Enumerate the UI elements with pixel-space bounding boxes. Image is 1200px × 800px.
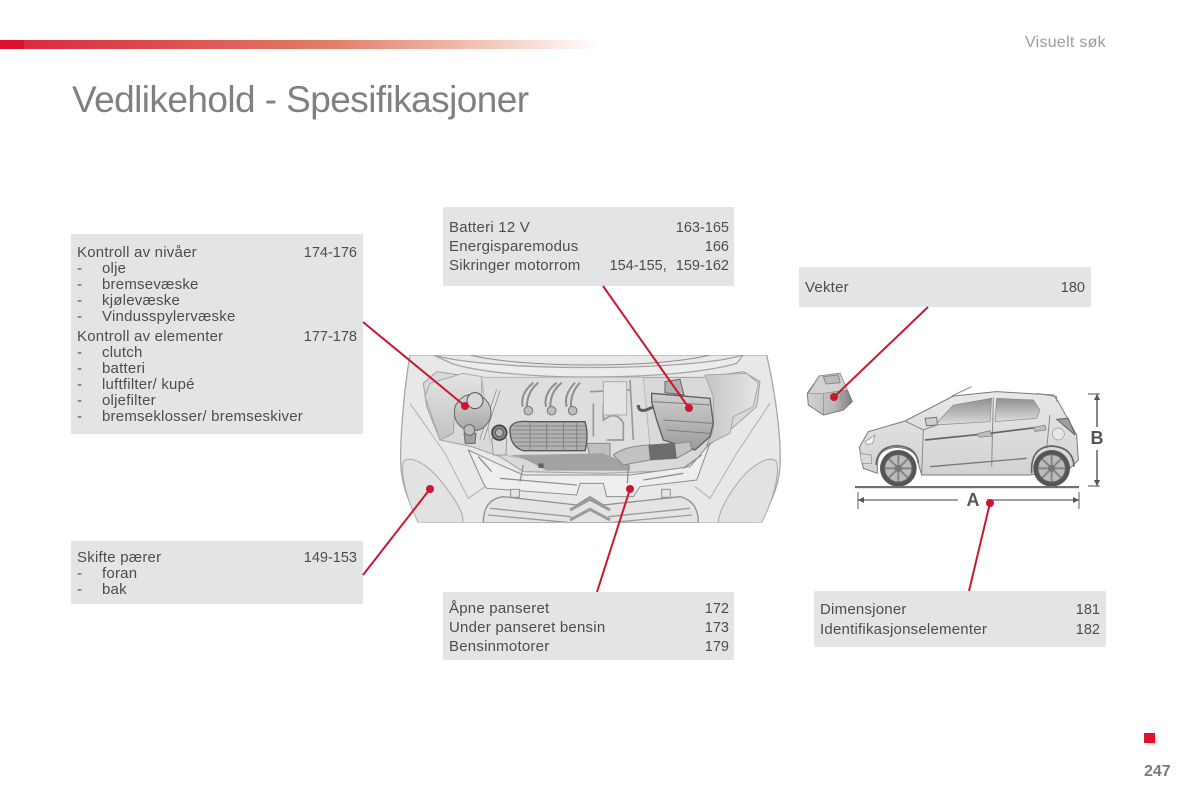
panel: bonnet: Bensinmotorer <box>449 638 549 655</box>
callout: bonnet <box>597 485 634 592</box>
panel: bulbs: 149-153 <box>304 550 357 566</box>
panel: weights <box>799 267 1091 307</box>
panel: levels and elements: - <box>77 276 82 293</box>
panel: weights: Vekter <box>805 279 849 296</box>
panel: dimensions <box>814 591 1106 647</box>
panel: levels and elements: - <box>77 408 82 425</box>
panel: levels and elements: luftfilter/ kupé <box>102 376 195 393</box>
front panel <box>468 443 710 497</box>
air intake <box>510 421 587 451</box>
header gradient bar <box>0 40 600 49</box>
panel: dimensions: 181 <box>1076 602 1100 618</box>
panel: levels and elements: clutch <box>102 344 143 361</box>
panel: bulbs: - <box>77 581 82 598</box>
panel: levels and elements: - <box>77 260 82 277</box>
section label: Visuelt søk <box>1025 34 1106 51</box>
panel: battery <box>443 207 734 286</box>
panel: levels and elements: bremseklosser/ bremseskiver <box>102 408 303 425</box>
chevrons <box>570 499 610 520</box>
panel: levels and elements: - <box>77 308 82 325</box>
icon: wheel weight <box>807 373 852 415</box>
headlights and fenders <box>403 459 463 523</box>
outer bodywork <box>401 355 780 523</box>
panel: bulbs: - <box>77 565 82 582</box>
panel: levels and elements: oljefilter <box>102 392 156 409</box>
panel: battery: Sikringer motorrom <box>449 257 580 274</box>
dimension B: B <box>1090 428 1104 448</box>
callout: battery <box>603 286 693 412</box>
panel: bulbs: Skifte pærer <box>77 549 161 566</box>
callout: weights <box>830 307 928 401</box>
panel: dimensions: Dimensjoner <box>820 601 907 618</box>
panel: levels and elements: - <box>77 292 82 309</box>
callout: levels <box>363 322 469 410</box>
illustration: car side view <box>859 387 1078 487</box>
page number: 247 <box>1144 763 1171 780</box>
callout: bulbs <box>363 485 434 575</box>
battery <box>665 379 684 395</box>
dimension B <box>1088 394 1104 486</box>
pipes and centre parts <box>482 390 498 440</box>
grille <box>483 497 698 523</box>
panel: battery: 166 <box>705 239 729 255</box>
panel: bonnet: Åpne panseret <box>449 600 549 617</box>
panel: levels and elements: - <box>77 392 82 409</box>
panel: battery: 163-165 <box>676 220 729 236</box>
panel: battery: 154-155, 159-162 <box>610 258 729 274</box>
lower dark engine mass <box>510 453 630 471</box>
panel: levels and elements: - <box>77 360 82 377</box>
panel: bonnet: 172 <box>705 601 729 617</box>
bay interior <box>423 372 760 473</box>
coolant reservoir <box>464 433 476 443</box>
panel: levels and elements: olje <box>102 260 126 277</box>
panel: levels and elements: - <box>77 344 82 361</box>
panel: levels and elements: Vindusspylervæske <box>102 308 236 325</box>
intake hose <box>613 442 692 465</box>
dimension A <box>855 486 1079 510</box>
panel: weights: 180 <box>1061 280 1085 296</box>
panel: levels and elements: Kontroll av nivåer <box>77 244 197 261</box>
panel: battery: Energisparemodus <box>449 238 578 255</box>
panel: levels and elements: Kontroll av elementer <box>77 328 223 345</box>
panel: bonnet <box>443 592 734 660</box>
panel: dimensions: 182 <box>1076 622 1100 638</box>
panel: battery: Batteri 12 V <box>449 219 530 236</box>
panel: bulbs: bak <box>102 581 127 598</box>
dimension A: A <box>966 490 980 510</box>
illustrations and callouts <box>362 285 1103 592</box>
panel: levels and elements: 174-176 <box>304 245 357 261</box>
panel: bonnet: Under panseret bensin <box>449 619 605 636</box>
panel: levels and elements: bremsevæske <box>102 276 199 293</box>
panel: levels and elements: kjølevæske <box>102 292 180 309</box>
title: Vedlikehold - Spesifikasjoner <box>72 79 529 120</box>
coil packs <box>521 382 581 407</box>
panel: levels and elements: - <box>77 376 82 393</box>
oil filler cap <box>492 438 507 455</box>
callout: dimensions <box>969 499 994 591</box>
panel: bonnet: 179 <box>705 639 729 655</box>
panel: levels and elements: batteri <box>102 360 145 377</box>
panel: bulbs: foran <box>102 565 137 582</box>
panel: bonnet: 173 <box>705 620 729 636</box>
page marker square <box>1144 733 1155 743</box>
panel: bulbs <box>71 541 363 604</box>
panel: levels and elements <box>71 234 363 434</box>
panel: levels and elements: 177-178 <box>304 329 357 345</box>
panel: dimensions: Identifikasjonselementer <box>820 621 987 638</box>
illustration: engine bay <box>401 355 780 523</box>
